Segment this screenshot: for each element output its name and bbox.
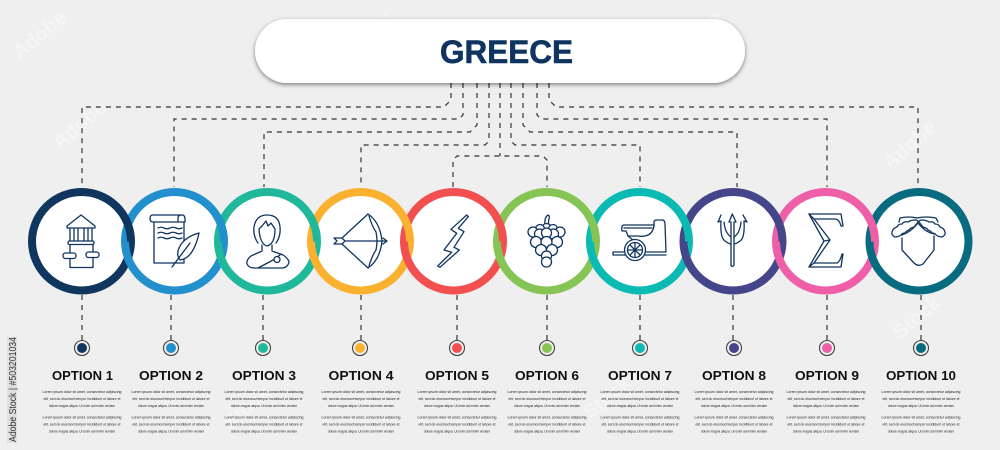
option 7 text: elit, sed do eiusmod tempor incididunt ut labore et	[602, 397, 678, 401]
coloured rings, upper halves	[32, 192, 968, 242]
option 8 text: OPTION 8	[702, 368, 766, 383]
option 5 text: dolore magna aliqua. Ut enim ad minim veniam	[424, 430, 490, 434]
option 2 text: Lorem ipsum dolor sit amet, consectetur adipiscing	[132, 390, 210, 394]
option 9 text: Lorem ipsum dolor sit amet, consectetur adipiscing	[786, 390, 866, 394]
option 8 text: dolore magna aliqua. Ut enim ad minim veniam	[701, 430, 767, 434]
option 2 text: Lorem ipsum dolor sit amet, consectetur adipiscing	[132, 416, 210, 420]
option 4 text: dolore magna aliqua. Ut enim ad minim veniam	[328, 404, 394, 408]
watermark: Adobe	[334, 7, 396, 64]
icon: temple tower	[63, 215, 99, 268]
option 3 text: Lorem ipsum dolor sit amet, consectetur adipiscing	[224, 416, 304, 420]
option 9 text: elit, sed do eiusmod tempor incididunt ut labore et	[788, 422, 864, 426]
icon: laurel wreath head	[892, 217, 945, 265]
option 10 text: Lorem ipsum dolor sit amet, consectetur adipiscing	[882, 416, 960, 420]
option 3 text: Lorem ipsum dolor sit amet, consectetur adipiscing	[224, 390, 304, 394]
option 10 text: Lorem ipsum dolor sit amet, consectetur adipiscing	[882, 390, 960, 394]
option 7 text	[600, 368, 680, 434]
option 2 text: OPTION 2	[139, 368, 203, 383]
watermark: Stock	[579, 371, 636, 424]
option 7 text: Lorem ipsum dolor sit amet, consectetur adipiscing	[600, 390, 680, 394]
option 6 text: Lorem ipsum dolor sit amet, consectetur adipiscing	[508, 390, 586, 394]
option 4 text: elit, sed do eiusmod tempor incididunt ut labore et	[322, 422, 400, 426]
option 9 text: dolore magna aliqua. Ut enim ad minim veniam	[793, 404, 859, 408]
option 1 text: dolore magna aliqua. Ut enim ad minim veniam	[49, 430, 115, 434]
option 1 text: dolore magna aliqua. Ut enim ad minim veniam	[49, 404, 115, 408]
option 4 text: OPTION 4	[328, 368, 394, 383]
option 2 text: dolore magna aliqua. Ut enim ad minim veniam	[138, 430, 204, 434]
option 10 text: dolore magna aliqua. Ut enim ad minim veniam	[888, 430, 954, 434]
watermark: Adobe	[49, 97, 111, 154]
option 9 text: OPTION 9	[795, 368, 859, 383]
option 2 text: elit, sed do eiusmod tempor incididunt ut labore et	[132, 397, 210, 401]
watermark: Stock	[889, 291, 946, 344]
option 4 text: Lorem ipsum dolor sit amet, consectetur adipiscing	[322, 390, 400, 394]
option 10 text: OPTION 10	[886, 368, 956, 383]
option 6 text: dolore magna aliqua. Ut enim ad minim veniam	[514, 404, 580, 408]
option 8 text: Lorem ipsum dolor sit amet, consectetur adipiscing	[694, 390, 774, 394]
option 6 text: Lorem ipsum dolor sit amet, consectetur adipiscing	[508, 416, 586, 420]
option 5 text: elit, sed do eiusmod tempor incididunt ut labore et	[418, 422, 496, 426]
option 7 text: dolore magna aliqua. Ut enim ad minim veniam	[607, 430, 673, 434]
option 9 text	[786, 368, 866, 434]
option 1 text: Lorem ipsum dolor sit amet, consectetur adipiscing	[42, 416, 122, 420]
option 3 text: dolore magna aliqua. Ut enim ad minim veniam	[231, 430, 297, 434]
option 3 text	[224, 368, 304, 434]
option 4 text	[322, 368, 400, 434]
option 10 text: dolore magna aliqua. Ut enim ad minim veniam	[888, 404, 954, 408]
option 1 text: elit, sed do eiusmod tempor incididunt ut labore et	[44, 422, 120, 426]
option 9 text: elit, sed do eiusmod tempor incididunt ut labore et	[788, 397, 864, 401]
option 4 text: Lorem ipsum dolor sit amet, consectetur adipiscing	[322, 416, 400, 420]
option 6 text: elit, sed do eiusmod tempor incididunt ut labore et	[508, 397, 586, 401]
option 1 text: Lorem ipsum dolor sit amet, consectetur adipiscing	[42, 390, 122, 394]
icon: sigma	[809, 214, 843, 267]
option 2 text: dolore magna aliqua. Ut enim ad minim veniam	[138, 404, 204, 408]
option 8 text: dolore magna aliqua. Ut enim ad minim veniam	[701, 404, 767, 408]
option 10 text	[882, 368, 960, 434]
watermark: Adobe	[879, 117, 941, 174]
icon: grapes	[528, 215, 565, 267]
option 4 text: elit, sed do eiusmod tempor incididunt ut labore et	[322, 397, 400, 401]
title pill	[255, 19, 745, 83]
option 4 text: dolore magna aliqua. Ut enim ad minim veniam	[328, 430, 394, 434]
icon: trident	[718, 214, 747, 266]
option 5 text: Lorem ipsum dolor sit amet, consectetur adipiscing	[418, 416, 496, 420]
marker dots	[74, 340, 928, 356]
lower connector lines to marker dots	[82, 295, 921, 340]
option 7 text: dolore magna aliqua. Ut enim ad minim veniam	[607, 404, 673, 408]
watermark: Stock	[219, 381, 276, 434]
option 7 text: Lorem ipsum dolor sit amet, consectetur adipiscing	[600, 416, 680, 420]
option 1 text: OPTION 1	[52, 368, 113, 383]
option 10 text: elit, sed do eiusmod tempor incididunt ut labore et	[882, 422, 960, 426]
option 9 text: Lorem ipsum dolor sit amet, consectetur adipiscing	[786, 416, 866, 420]
option 7 text: OPTION 7	[608, 368, 672, 383]
option 8 text	[694, 368, 774, 434]
option 7 text: elit, sed do eiusmod tempor incididunt ut labore et	[602, 422, 678, 426]
option 2 text	[132, 368, 210, 434]
option 5 text	[418, 368, 496, 434]
option 1 text	[42, 368, 122, 434]
option 1 text: elit, sed do eiusmod tempor incididunt ut labore et	[44, 397, 120, 401]
option 6 text: dolore magna aliqua. Ut enim ad minim veniam	[514, 430, 580, 434]
side credit text: Adobe Stock | #503201034	[8, 337, 19, 442]
icon: bow and arrow	[334, 214, 387, 268]
icon: scroll and quill	[150, 215, 199, 267]
option 3 text: OPTION 3	[232, 368, 296, 383]
watermark: Adobe	[9, 7, 71, 64]
option 5 text: elit, sed do eiusmod tempor incididunt ut labore et	[418, 397, 496, 401]
option 5 text: Lorem ipsum dolor sit amet, consectetur adipiscing	[418, 390, 496, 394]
option 10 text: elit, sed do eiusmod tempor incididunt ut labore et	[882, 397, 960, 401]
option 6 text: OPTION 6	[515, 368, 579, 383]
option 8 text: elit, sed do eiusmod tempor incididunt ut labore et	[696, 422, 772, 426]
option 9 text: dolore magna aliqua. Ut enim ad minim veniam	[793, 430, 859, 434]
option 6 text: elit, sed do eiusmod tempor incididunt ut labore et	[508, 422, 586, 426]
icon: chariot	[613, 220, 666, 260]
option 2 text: elit, sed do eiusmod tempor incididunt ut labore et	[132, 422, 210, 426]
option 5 text: OPTION 5	[425, 368, 489, 383]
option 8 text: elit, sed do eiusmod tempor incididunt ut labore et	[696, 397, 772, 401]
icon: lightning bolt	[438, 215, 468, 267]
circle white backgrounds	[32, 191, 969, 291]
icon: greek man bust	[247, 215, 289, 268]
title: GREECE	[440, 34, 573, 70]
connector lines from title to circles	[82, 83, 918, 187]
coloured rings, lower halves	[32, 241, 968, 290]
option 3 text: dolore magna aliqua. Ut enim ad minim veniam	[231, 404, 297, 408]
option 3 text: elit, sed do eiusmod tempor incididunt ut labore et	[226, 422, 302, 426]
option 3 text: elit, sed do eiusmod tempor incididunt ut labore et	[226, 397, 302, 401]
option 6 text	[508, 368, 586, 434]
watermark: Adobe	[664, 7, 726, 64]
option 8 text: Lorem ipsum dolor sit amet, consectetur adipiscing	[694, 416, 774, 420]
option 5 text: dolore magna aliqua. Ut enim ad minim veniam	[424, 404, 490, 408]
